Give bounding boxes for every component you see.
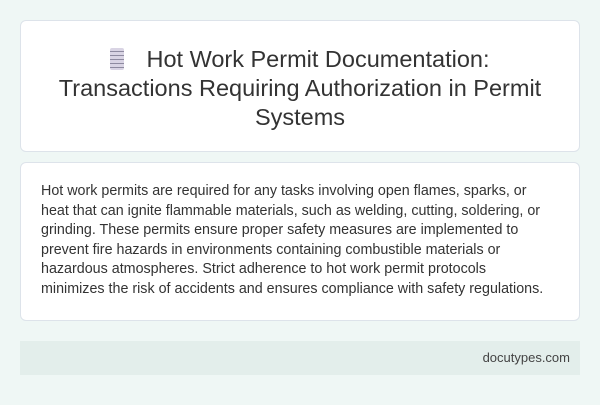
text block xyxy=(41,183,543,296)
icon: document xyxy=(110,48,124,70)
text block: minimizes the risk of accidents and ensures compliance with safety regulations. xyxy=(41,280,543,296)
footer text: docutypes.com xyxy=(483,350,570,365)
footer xyxy=(20,341,580,375)
text block: prevent fire hazards in environments containing combustible materials or xyxy=(41,242,500,258)
title: Systems xyxy=(255,104,345,130)
text block: Hot work permits are required for any tasks involving open flames, sparks, or xyxy=(41,183,527,199)
panel: description xyxy=(20,162,580,321)
title: Transactions Requiring Authorization in Permit xyxy=(59,75,541,101)
text block: hazardous atmospheres. Strict adherence to hot work permit protocols xyxy=(41,261,486,277)
title xyxy=(59,46,541,130)
text block: grinding. These permits ensure proper safety measures are implemented to xyxy=(41,222,518,238)
panel: title card xyxy=(20,20,580,152)
text block: heat that can ignite flammable materials, such as welding, cutting, soldering, or xyxy=(41,202,540,218)
title: Hot Work Permit Documentation: xyxy=(146,46,490,72)
